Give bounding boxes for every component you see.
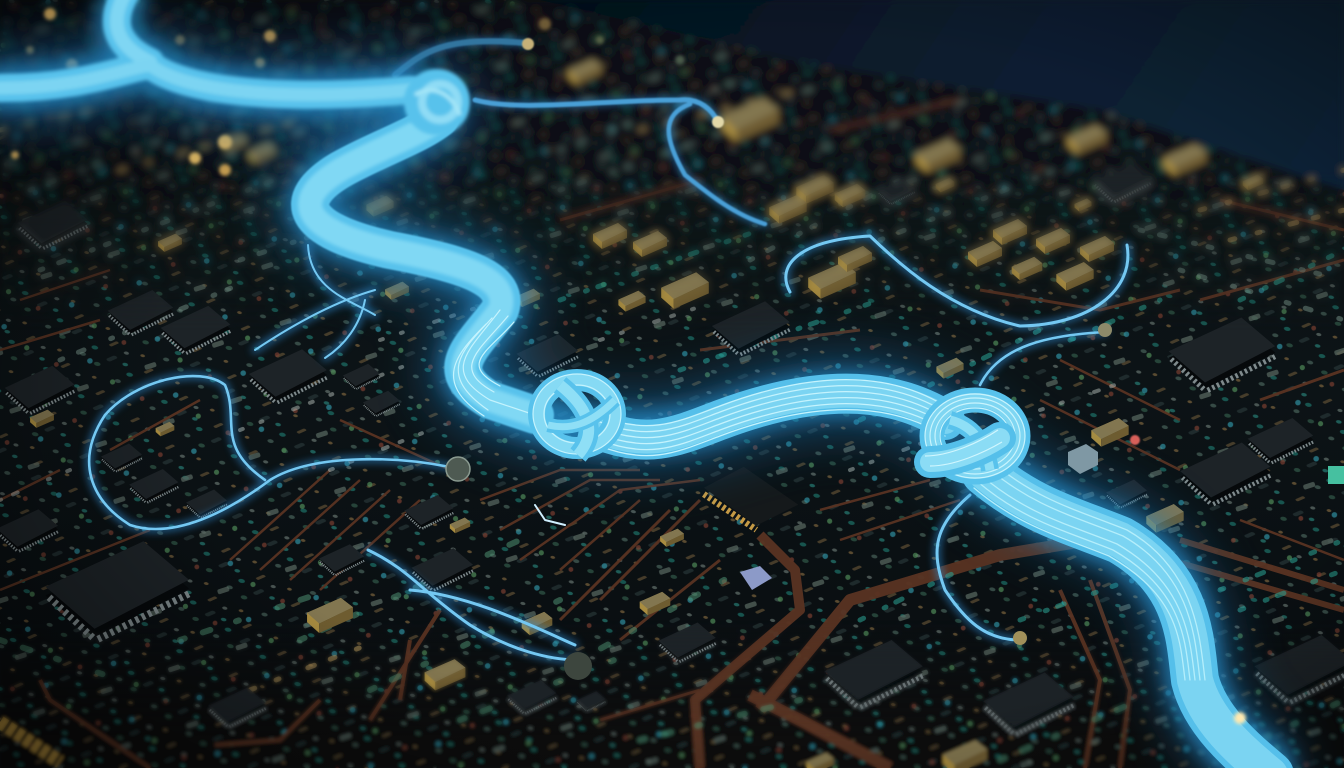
knot: right [925,394,1025,478]
cable: top segment [0,0,410,95]
wire glow [89,41,1128,660]
wire end nodes [446,38,1112,680]
knot: upper [407,72,467,132]
wire cores [89,236,1128,660]
cable: middle segment [600,380,945,456]
large chip with gold pins [704,467,798,530]
depth-of-field blur: bottom of board [0,631,1344,768]
blurred bokeh lights top-left [11,8,685,176]
knot: middle [533,374,621,455]
dark microchips [0,162,1344,734]
thin glowing wires [89,41,1128,660]
cable: descending segment [310,118,535,416]
blurred far wires [395,41,765,224]
bright accent components [740,435,1344,724]
cable: lower segment [974,462,1270,768]
gold component row bottom-left [0,722,60,762]
depth-of-field blur: top of board [0,0,1344,316]
